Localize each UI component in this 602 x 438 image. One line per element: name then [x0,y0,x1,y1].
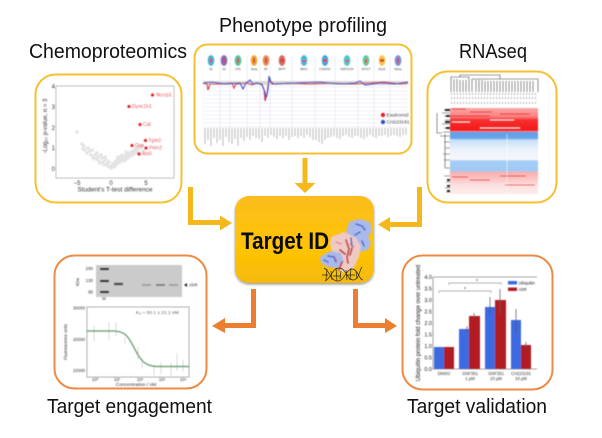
binding curve chart: 10⁴ [180,377,187,382]
bar chart: 1.0 [424,344,432,350]
bar chart: 3.0 [424,298,432,304]
western blot gel: 95 [88,290,94,294]
heading: Target engagement: Target engagement [47,396,212,418]
bar chart: 1 µM [465,376,475,381]
legend: Eautromid [386,113,409,119]
binding curve chart: 20000 [73,337,86,342]
plot frame: 2 [52,126,56,132]
plot frame [43,84,174,194]
profile chart: Mphg [394,67,402,71]
bar chart: 10 µM [490,376,502,381]
legend [508,280,535,292]
label: Target ID [241,228,329,255]
plot frame: Cat [143,122,151,128]
arrow: target to engagement [212,289,256,333]
bar chart [416,265,537,381]
binding curve chart: Concentration / nM [116,382,156,388]
profile chart: KF3CT [362,67,371,71]
western blot gel: AhR [189,282,198,288]
profile chart: MyoF [378,67,386,71]
binding curve chart: 10¹ [114,377,121,382]
plot frame: Student's T-test difference [77,186,153,194]
plot frame: Nccrp1 [156,93,172,99]
panel: target engagement [54,256,206,388]
plot frame: Prim2 [149,146,162,152]
binding curve chart: 10³ [159,377,166,382]
bar chart: 4.0 [424,275,432,281]
arrow: phenotype to target [294,158,316,193]
panel: RNAseq heatmap [428,72,556,202]
bar chart: CH223191 [511,371,532,376]
plot frame: 0 [109,181,113,187]
bar chart: 3.5 [424,286,432,292]
legend [381,113,410,126]
profile chart: 4H [222,67,226,71]
binding curve chart: 10⁰ [92,377,99,382]
heading: Phenotype profiling: Phenotype profiling [219,15,387,37]
plot frame: Tgm1 [148,138,162,144]
plot frame: 1 [52,146,56,152]
panel: chemoproteomics volcano plot [36,74,182,202]
profile chart: CASM3C [319,67,331,71]
western blot gel [75,265,198,301]
bar chart: GNF351 [462,371,479,376]
bar chart: 0.0 [424,367,432,373]
plot frame: AhR [142,152,152,158]
profile chart: BT [264,67,268,71]
dendrograms [437,75,538,192]
arrow: RNAseq to target [378,187,422,232]
western blot gel: 250 [86,266,94,271]
profile chart: LPS [235,67,241,71]
western blot gel: kDa [75,278,80,286]
legend: AhR [518,287,527,292]
central box: Target ID [235,196,374,283]
arrow: target to validation [353,289,397,333]
plot frame: 3 [52,105,56,111]
plot frame: -Log₁₀ p-value, n = 3 [43,98,49,153]
western blot gel: 130 [86,278,94,283]
panel: target validation [402,256,552,390]
profile chart [203,55,410,146]
heatmap body [450,108,538,194]
binding curve chart [63,306,189,388]
binding curve chart: 30000 [73,306,86,310]
western blot gel: M [102,296,106,301]
bar chart: 2.0 [424,321,432,327]
profile chart: BF4T [279,67,286,71]
arrow: chemoproteomics to target [188,187,232,230]
plot frame: Dync1h1 [132,104,152,110]
bar chart: 10 µM [515,376,527,381]
heading: Target validation: Target validation [407,396,547,418]
profile chart: BE3C [300,67,308,71]
bar chart: 2.5 [424,310,432,316]
binding curve chart: K₀ = 50.1 ± 21.1 nM [136,310,179,316]
plot frame: 4 [52,84,56,90]
cell line icons [208,55,401,66]
legend: Ubiquitin [518,280,535,286]
binding curve chart: Fluorescence units [63,324,68,360]
plot frame: 0 [52,167,56,173]
bar chart: 1.5 [424,332,432,338]
bar chart: DMSO [438,371,451,376]
plot frame: 5 [144,181,148,187]
legend: CH223191 [386,120,410,126]
binding curve chart: 10² [137,377,144,382]
profile chart: HDF3CGF [340,67,354,71]
profile chart: Sbsg [251,67,258,71]
panel: phenotype profiling [194,44,412,154]
heading: RNAseq: RNAseq [459,41,527,63]
bar chart: Ubiquitin protein fold change over untreated [416,265,422,381]
plot frame: Dsp [135,143,144,149]
bar chart: * [464,287,466,293]
profile chart: 3C [209,67,213,71]
bar chart: GNF351 [488,371,505,376]
heading: Chemoproteomics: Chemoproteomics [29,41,187,63]
binding curve chart: 10000 [73,368,86,373]
icon: protein DNA structure [320,219,372,273]
plot frame: −5 [74,181,81,187]
bar chart: * [476,279,478,285]
bar chart: 0.5 [424,356,432,362]
